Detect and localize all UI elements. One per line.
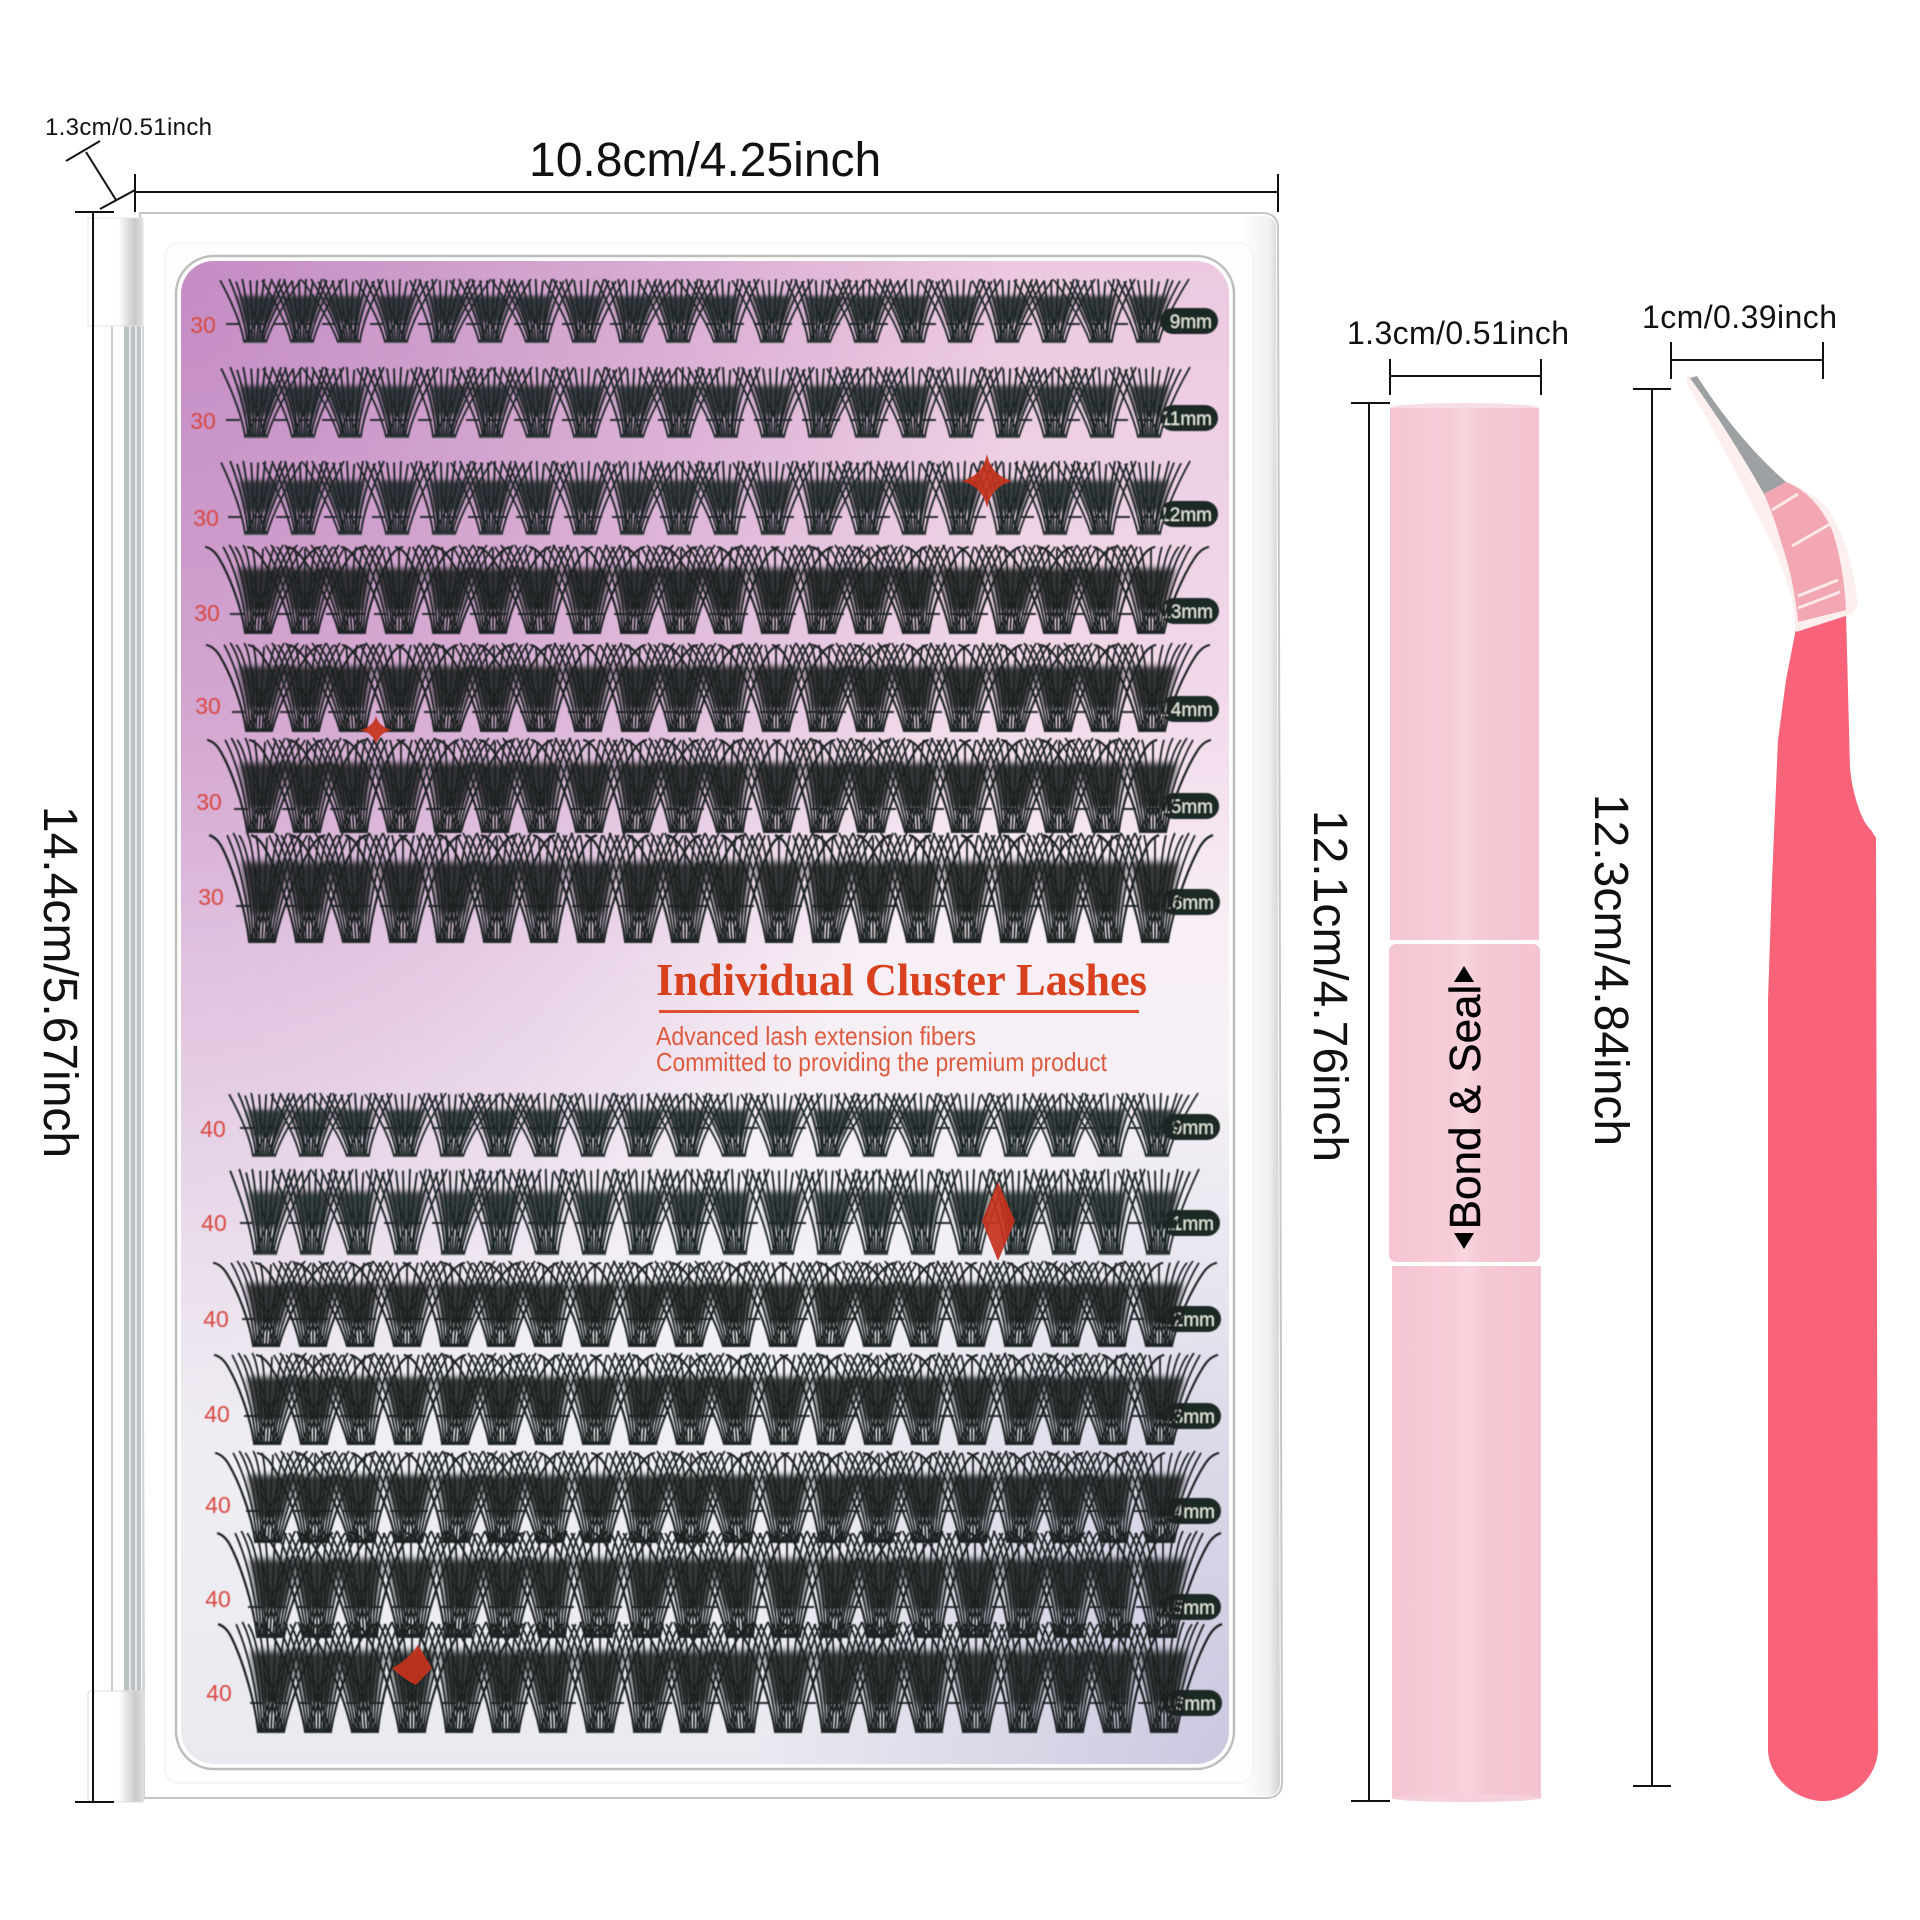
lash rows, lower block bbox=[200, 1093, 1222, 1733]
lash row: 40 count, 16mm bbox=[206, 1622, 1222, 1733]
lash row: 40 count, 11mm bbox=[201, 1169, 1220, 1255]
case inner frame bbox=[165, 243, 1253, 1783]
ornament: red diamond lower row 2 bbox=[982, 1182, 1015, 1261]
lash row: 40 count, 9mm: 40 bbox=[200, 1116, 226, 1142]
lash row: 40 count, 12mm: 12mm bbox=[1162, 1310, 1215, 1331]
lash row: 30 count, 13mm bbox=[194, 545, 1219, 634]
lash row: 30 count, 16mm bbox=[198, 833, 1220, 943]
card background bbox=[181, 261, 1229, 1764]
card border bbox=[176, 256, 1234, 1769]
zipper bottom cap bbox=[88, 1691, 144, 1802]
dimension: case depth 1.3cm/0.51inch bbox=[45, 114, 212, 209]
lash row: 40 count, 11mm: 40 bbox=[201, 1210, 227, 1236]
dimension: case height 14.4cm/5.67inch: 14.4cm/5.67inch bbox=[33, 806, 86, 1158]
panel: tweezers bbox=[1686, 374, 1878, 1801]
heading: Individual Cluster Lashes: Individual Cluster Lashes bbox=[656, 954, 1147, 1005]
lash row: 40 count, 14mm: 14mm bbox=[1162, 1502, 1215, 1523]
panel: adhesive pen bbox=[1389, 403, 1541, 1802]
dimension: tweezers width 1cm/0.39inch bbox=[1642, 299, 1837, 379]
lash row: 40 count, 16mm: 40 bbox=[206, 1680, 232, 1706]
lash row: 30 count, 11mm: 30 bbox=[190, 408, 216, 434]
heading underline bbox=[659, 1010, 1139, 1013]
dimension: tweezers width 1cm/0.39inch: 1cm/0.39inch bbox=[1642, 299, 1837, 335]
lash row: 30 count, 12mm bbox=[193, 461, 1218, 535]
pen label text: Bond & Seal bbox=[1441, 985, 1490, 1229]
dimension: case depth 1.3cm/0.51inch: 1.3cm/0.51inch bbox=[45, 114, 212, 141]
lash rows, upper block bbox=[190, 279, 1220, 943]
lash row: 40 count, 15mm: 40 bbox=[205, 1586, 231, 1612]
lash row: 30 count, 9mm: 30 bbox=[190, 312, 216, 338]
pen lower barrel bbox=[1391, 1266, 1541, 1802]
ornament: red star lower row 7 bbox=[392, 1645, 432, 1685]
lash row: 40 count, 14mm: 40 bbox=[205, 1492, 231, 1518]
case shell bbox=[140, 213, 1282, 1798]
ornament: red star row 3 bbox=[962, 454, 1012, 508]
lash row: 30 count, 11mm bbox=[190, 367, 1218, 438]
panel: lash storage case bbox=[88, 213, 1282, 1802]
text: tagline line one: Advanced lash extension fibers bbox=[656, 1021, 976, 1051]
lash row: 40 count, 12mm: 40 bbox=[203, 1306, 229, 1332]
lash row: 30 count, 13mm: 13mm bbox=[1160, 602, 1213, 623]
lash row: 30 count, 16mm: 16mm bbox=[1161, 893, 1214, 914]
lash row: 40 count, 15mm: 15mm bbox=[1162, 1598, 1215, 1619]
case right edge shading bbox=[1240, 216, 1280, 1796]
pen middle label band bbox=[1389, 944, 1540, 1262]
lash row: 30 count, 16mm: 30 bbox=[198, 884, 224, 910]
lash row: 30 count, 9mm: 9mm bbox=[1170, 312, 1212, 333]
lash row: 30 count, 9mm bbox=[190, 279, 1218, 343]
dimension: pen height 12.1cm/4.76inch: 12.1cm/4.76inch bbox=[1303, 810, 1356, 1162]
lash row: 30 count, 15mm: 30 bbox=[196, 789, 222, 815]
lash row: 40 count, 9mm bbox=[200, 1093, 1220, 1157]
lash row: 40 count, 13mm: 13mm bbox=[1162, 1407, 1215, 1428]
ornament: red star row 5 bbox=[360, 716, 392, 744]
dimension: pen height 12.1cm/4.76inch bbox=[1303, 403, 1390, 1801]
tweezers translucent sleeve halo bbox=[1686, 374, 1858, 632]
lash row: 30 count, 12mm: 12mm bbox=[1159, 505, 1212, 526]
lash row: 30 count, 12mm: 30 bbox=[193, 505, 219, 531]
dimension: case width 10.8cm/4.25inch: 10.8cm/4.25inch bbox=[529, 134, 881, 187]
zipper top cap bbox=[88, 218, 143, 326]
tweezers steel tip bbox=[1690, 376, 1786, 494]
lash row: 30 count, 14mm bbox=[195, 643, 1219, 732]
lash row: 40 count, 13mm: 40 bbox=[204, 1401, 230, 1427]
lash row: 40 count, 11mm: 11mm bbox=[1163, 1214, 1214, 1235]
icon: down arrow bbox=[1454, 1233, 1474, 1249]
dimension: case height 14.4cm/5.67inch bbox=[33, 212, 114, 1802]
lash row: 30 count, 15mm: 15mm bbox=[1160, 797, 1213, 818]
pen cap upper barrel bbox=[1389, 403, 1539, 940]
dimension: pen width 1.3cm/0.51inch bbox=[1347, 315, 1569, 395]
lash row: 40 count, 13mm bbox=[204, 1353, 1221, 1445]
lash row: 30 count, 15mm bbox=[196, 738, 1219, 833]
dimension: pen width 1.3cm/0.51inch: 1.3cm/0.51inch bbox=[1347, 315, 1569, 351]
lash row: 40 count, 9mm: 9mm bbox=[1172, 1118, 1214, 1139]
lash row: 40 count, 15mm bbox=[205, 1531, 1221, 1638]
lash row: 30 count, 13mm: 30 bbox=[194, 600, 220, 626]
dimension: tweezers height 12.3cm/4.84inch: 12.3cm/4.84inch bbox=[1584, 794, 1637, 1146]
lash row: 40 count, 12mm bbox=[203, 1261, 1221, 1347]
text: tagline line two: Committed to providing the premium product bbox=[656, 1047, 1108, 1077]
zipper rail bbox=[112, 326, 144, 1692]
dimension: case width 10.8cm/4.25inch bbox=[135, 134, 1278, 212]
icon: up arrow bbox=[1454, 966, 1474, 982]
tweezers pink sleeve bbox=[1764, 482, 1846, 622]
lash row: 40 count, 14mm bbox=[205, 1451, 1221, 1543]
dimension: tweezers height 12.3cm/4.84inch bbox=[1584, 389, 1671, 1786]
lash row: 40 count, 16mm: 16mm bbox=[1163, 1694, 1216, 1715]
lash row: 30 count, 14mm: 14mm bbox=[1160, 700, 1213, 721]
lash row: 30 count, 11mm: 11mm bbox=[1161, 409, 1212, 430]
tweezers sleeve ridges bbox=[1772, 494, 1840, 608]
tweezers coral body bbox=[1768, 612, 1878, 1801]
lash row: 30 count, 14mm: 30 bbox=[195, 693, 221, 719]
